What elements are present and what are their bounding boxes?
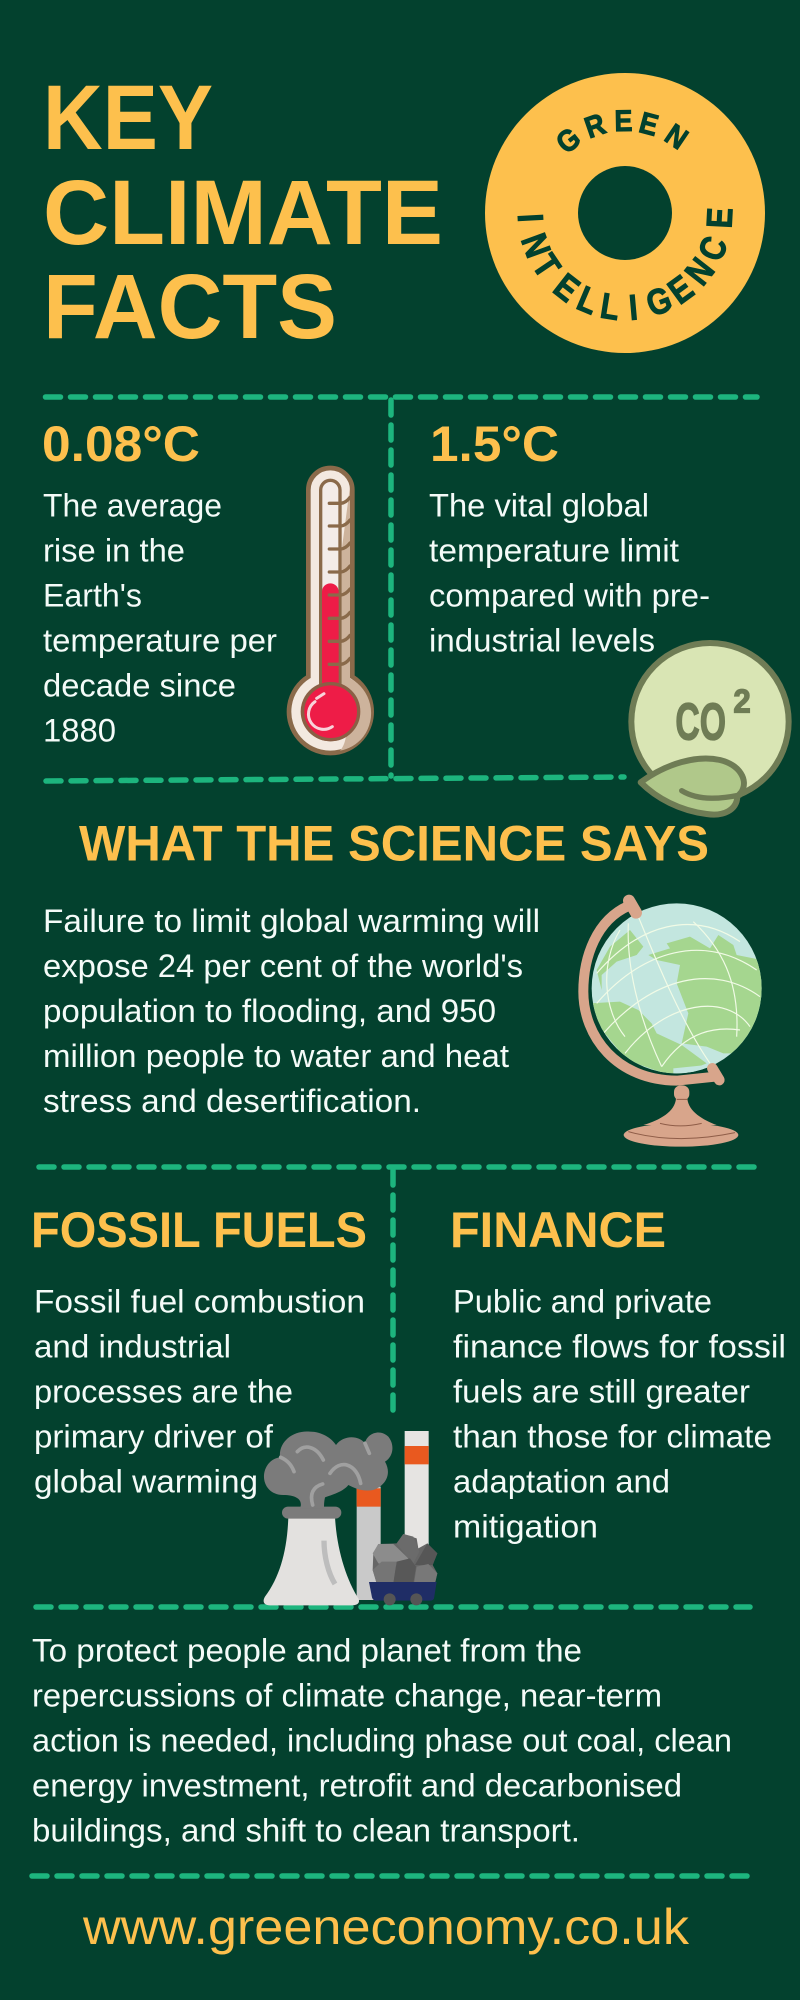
icon: CO2 leaf: 2 bbox=[733, 683, 751, 720]
divider: above website bbox=[32, 1873, 750, 1879]
logo badge: Green Intelligence: L bbox=[571, 279, 604, 323]
divider: below science bbox=[39, 1164, 757, 1170]
finance description: than those for climate bbox=[453, 1418, 772, 1454]
panel: fossil fuels bbox=[31, 1202, 367, 1500]
fossil fuels description: Fossil fuel combustion bbox=[34, 1284, 365, 1320]
divider: fossil and finance split bbox=[390, 1170, 396, 1410]
stat description bbox=[429, 488, 710, 658]
website url: www.greeneconomy.co.uk bbox=[82, 1899, 690, 1955]
text block: science: Failure to limit global warming will bbox=[43, 903, 540, 939]
icon: CO2 leaf bbox=[631, 643, 789, 815]
logo badge: Green Intelligence: E bbox=[546, 266, 586, 310]
logo badge: Green Intelligence: N bbox=[659, 118, 694, 157]
text block: call to action bbox=[32, 1632, 732, 1848]
finance description: finance flows for fossil bbox=[453, 1328, 786, 1364]
stat description: temperature limit bbox=[429, 532, 679, 568]
stat value: 1.5°C bbox=[430, 416, 559, 472]
logo badge: Green Intelligence: N bbox=[678, 251, 723, 293]
finance description: fuels are still greater bbox=[453, 1374, 750, 1410]
text block: call to action: energy investment, retrofit and decarbonised bbox=[32, 1768, 682, 1804]
stat description: rise in the bbox=[43, 532, 185, 568]
heading: what the science says: WHAT THE SCIENCE SAYS bbox=[79, 816, 709, 872]
stat description: 1880 bbox=[43, 712, 116, 748]
icon: thermometer bbox=[289, 468, 372, 753]
finance description: Public and private bbox=[453, 1284, 712, 1320]
stat description bbox=[43, 488, 277, 748]
heading: finance: FINANCE bbox=[450, 1202, 666, 1258]
stat value: 0.08°C bbox=[42, 416, 200, 472]
logo badge: Green Intelligence: I bbox=[627, 288, 639, 329]
divider: top bbox=[46, 394, 757, 400]
panel: 0.08C stat bbox=[42, 416, 277, 748]
text block: science: expose 24 per cent of the world's bbox=[43, 948, 523, 984]
text block: science bbox=[43, 903, 540, 1119]
panel: finance bbox=[450, 1202, 786, 1544]
icon: power plant and coal cart bbox=[264, 1431, 437, 1605]
logo badge: Green Intelligence: G bbox=[550, 121, 587, 161]
fossil fuels description: primary driver of bbox=[34, 1418, 273, 1454]
logo badge: Green Intelligence: E bbox=[700, 207, 741, 229]
logo badge: Green Intelligence: G bbox=[641, 279, 678, 325]
stat description: decade since bbox=[43, 668, 236, 704]
text block: call to action: repercussions of climate change, near-term bbox=[32, 1678, 662, 1714]
logo badge: Green Intelligence: I bbox=[509, 213, 550, 223]
text block: science: stress and desertification. bbox=[43, 1083, 421, 1119]
divider: below stats bbox=[46, 777, 624, 781]
stat description: compared with pre- bbox=[429, 578, 710, 614]
title: CLIMATE bbox=[43, 162, 443, 264]
text block: call to action: action is needed, including phase out coal, clean bbox=[32, 1722, 732, 1758]
heading: fossil fuels: FOSSIL FUELS bbox=[31, 1202, 367, 1258]
fossil fuels description: and industrial bbox=[34, 1328, 231, 1364]
icon: globe bbox=[583, 901, 762, 1147]
title: FACTS bbox=[43, 256, 337, 358]
panel: 1.5C stat bbox=[429, 416, 710, 658]
logo badge: Green Intelligence: E bbox=[636, 106, 662, 143]
stat description: Earth's bbox=[43, 578, 142, 614]
stat description: temperature per bbox=[43, 622, 277, 658]
logo badge: Green Intelligence: L bbox=[598, 286, 622, 329]
logo badge: Green Intelligence: E bbox=[614, 105, 633, 139]
finance description: mitigation bbox=[453, 1508, 598, 1544]
stat description: The average bbox=[43, 488, 222, 524]
text block: call to action: To protect people and planet from the bbox=[32, 1632, 582, 1668]
finance description: adaptation and bbox=[453, 1464, 670, 1500]
fossil fuels description bbox=[34, 1284, 365, 1500]
divider: first column split bbox=[388, 400, 394, 776]
divider: below fossil and finance bbox=[36, 1604, 750, 1610]
fossil fuels description: global warming bbox=[34, 1464, 258, 1500]
logo badge: Green Intelligence bbox=[485, 73, 765, 353]
logo badge: Green Intelligence: N bbox=[513, 229, 558, 263]
icon: CO2 leaf: CO bbox=[675, 692, 726, 750]
title: KEY bbox=[43, 67, 213, 169]
logo badge: Green Intelligence: T bbox=[524, 248, 568, 286]
text block: science: million people to water and heat bbox=[43, 1038, 509, 1074]
text block: call to action: buildings, and shift to clean transport. bbox=[32, 1812, 580, 1848]
logo badge: Green Intelligence: R bbox=[581, 107, 610, 146]
fossil fuels description: processes are the bbox=[34, 1374, 293, 1410]
stat description: industrial levels bbox=[429, 622, 655, 658]
title bbox=[43, 67, 443, 358]
stat description: The vital global bbox=[429, 488, 649, 524]
logo badge: Green Intelligence: E bbox=[661, 268, 701, 313]
finance description bbox=[453, 1284, 786, 1544]
text block: science: population to flooding, and 950 bbox=[43, 993, 496, 1029]
logo badge: Green Intelligence: C bbox=[691, 231, 736, 267]
